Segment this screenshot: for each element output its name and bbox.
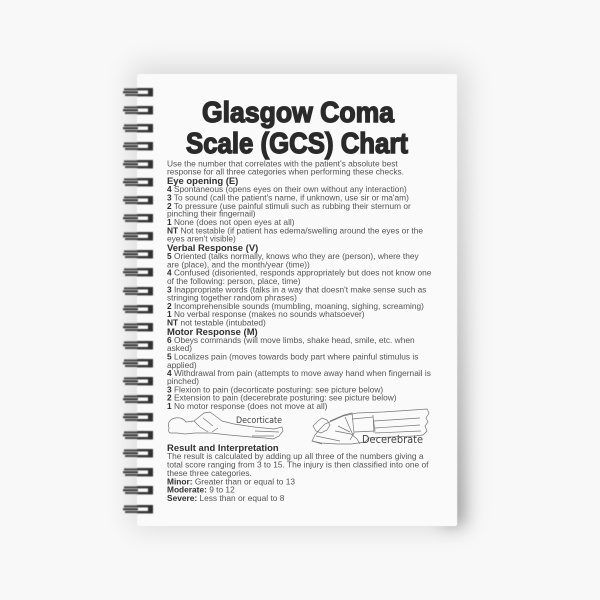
section: motor response: 2 Extension to pain (decerebrate posturing: see picture below) bbox=[167, 392, 397, 402]
section: eye opening: Eye opening (E) bbox=[167, 176, 238, 187]
section: result and interpretation bbox=[167, 443, 429, 503]
section: eye opening: 1 None (does not open eyes at all) bbox=[167, 217, 295, 227]
section: verbal response: Verbal Response (V) bbox=[167, 243, 258, 254]
title: Scale (GCS) Chart bbox=[186, 128, 408, 160]
introduction text: response for all three categories when performing these checks. bbox=[167, 167, 404, 177]
section: verbal response: 3 Inappropriate words (talks in a way that doesn't make sense such as bbox=[167, 284, 426, 294]
section: result and interpretation: these three categories. bbox=[167, 468, 252, 478]
section: eye opening: pinching their fingernail) bbox=[167, 209, 256, 219]
section: verbal response: 5 Oriented (talks normally, knows who they are (person), where they bbox=[167, 251, 419, 261]
title: Glasgow Coma bbox=[202, 97, 395, 129]
section: result and interpretation: Result and Interpretation bbox=[167, 443, 279, 454]
section: verbal response: of the following: person, place, time) bbox=[167, 276, 301, 286]
section: eye opening: eyes aren't visible) bbox=[167, 234, 236, 244]
section: verbal response: 4 Confused (disoriented, responds appropriately but does not know one bbox=[167, 268, 432, 278]
figure: decerebrate posture: Decerebrate bbox=[362, 433, 423, 446]
notebook shadow bbox=[132, 66, 467, 528]
section: eye opening: 4 Spontaneous (opens eyes on their own without any interaction) bbox=[167, 184, 407, 194]
figure: decorticate posture bbox=[168, 412, 283, 439]
section: result and interpretation: Minor: Greater than or equal to 13 bbox=[167, 476, 295, 486]
section: verbal response: NT not testable (intubated) bbox=[167, 318, 266, 328]
section: verbal response: stringing together random phrases) bbox=[167, 293, 297, 303]
section: result and interpretation: total score ranging from 3 to 15. The injury is then classified into one of bbox=[167, 460, 429, 470]
section: eye opening bbox=[167, 176, 423, 244]
section: verbal response: are (place), and the month/year (time)) bbox=[167, 260, 310, 270]
section: verbal response: 2 Incomprehensible sounds (mumbling, moaning, sighing, screaming) bbox=[167, 301, 424, 311]
notebook page bbox=[137, 74, 457, 526]
section: motor response: 1 No motor response (does not move at all) bbox=[167, 401, 328, 411]
section: eye opening: NT Not testable (if patient has edema/swelling around the eyes or the bbox=[167, 226, 423, 236]
section: motor response: pinched) bbox=[167, 376, 199, 386]
section: motor response: 3 Flexion to pain (decorticate posturing: see picture below) bbox=[167, 384, 383, 394]
section: result and interpretation: The result is calculated by adding up all three of the numbers giving a bbox=[167, 451, 424, 461]
section: eye opening: 2 To pressure (use painful stimuli such as rubbing their sternum or bbox=[167, 201, 411, 211]
figure: decorticate posture: Decorticate bbox=[236, 415, 282, 426]
section: motor response: 6 Obeys commands (will move limbs, shake head, smile, etc. when bbox=[167, 335, 415, 345]
section: motor response: 5 Localizes pain (moves towards body part where painful stimulus is bbox=[167, 352, 418, 362]
section: motor response: Motor Response (M) bbox=[167, 327, 258, 338]
section: eye opening: 3 To sound (call the patient's name, if unknown, use sir or ma'am) bbox=[167, 192, 409, 202]
section: motor response: asked) bbox=[167, 343, 192, 353]
section: verbal response bbox=[167, 243, 432, 328]
section: result and interpretation: Severe: Less than or equal to 8 bbox=[167, 493, 285, 503]
section: motor response bbox=[167, 327, 431, 411]
section: motor response: applied) bbox=[167, 360, 197, 370]
spiral binding bbox=[123, 88, 153, 513]
figure: decerebrate posture bbox=[312, 409, 429, 446]
introduction text: Use the number that correlates with the patient's absolute best bbox=[167, 158, 398, 168]
section: result and interpretation: Moderate: 9 to 12 bbox=[167, 484, 235, 494]
introduction text bbox=[167, 158, 404, 177]
title bbox=[186, 97, 408, 160]
section: verbal response: 1 No verbal response (makes no sounds whatsoever) bbox=[167, 309, 365, 319]
section: motor response: 4 Withdrawal from pain (attempts to move away hand when fingernail is bbox=[167, 368, 431, 378]
